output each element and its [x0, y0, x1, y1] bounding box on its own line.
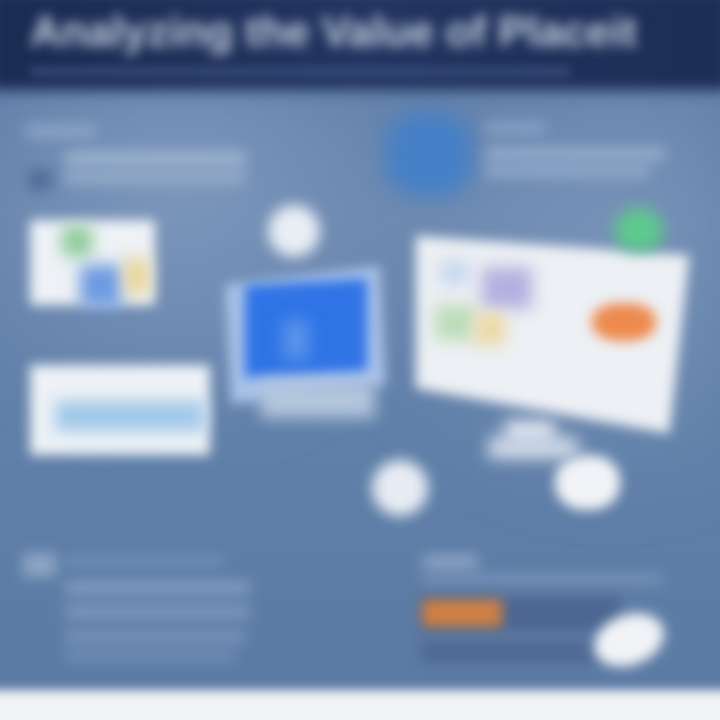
tablet icon — [220, 260, 392, 428]
white blob — [587, 604, 671, 676]
text block: bottom left — [18, 546, 253, 664]
footer strip — [0, 690, 720, 720]
dark bar — [420, 597, 620, 631]
green badge — [615, 208, 663, 252]
icon: shield top centre — [385, 112, 473, 196]
card: chart left — [21, 356, 220, 464]
monitor stand — [505, 420, 555, 445]
white blob — [555, 455, 620, 510]
card: map left — [21, 212, 164, 316]
pie chart — [482, 267, 532, 309]
title: Analyzing the Value of Placeit — [30, 8, 637, 56]
icon: white circle bottom — [372, 460, 428, 516]
orange bar — [422, 599, 502, 627]
text block: top left — [24, 120, 249, 195]
orange bar — [592, 303, 656, 341]
text block: top right — [480, 118, 668, 182]
icon: white circle top — [268, 205, 320, 257]
header band — [0, 0, 720, 90]
monitor — [407, 201, 696, 519]
panel: bottom right — [413, 548, 672, 676]
subtitle — [30, 68, 570, 75]
monitor screen — [407, 228, 696, 440]
